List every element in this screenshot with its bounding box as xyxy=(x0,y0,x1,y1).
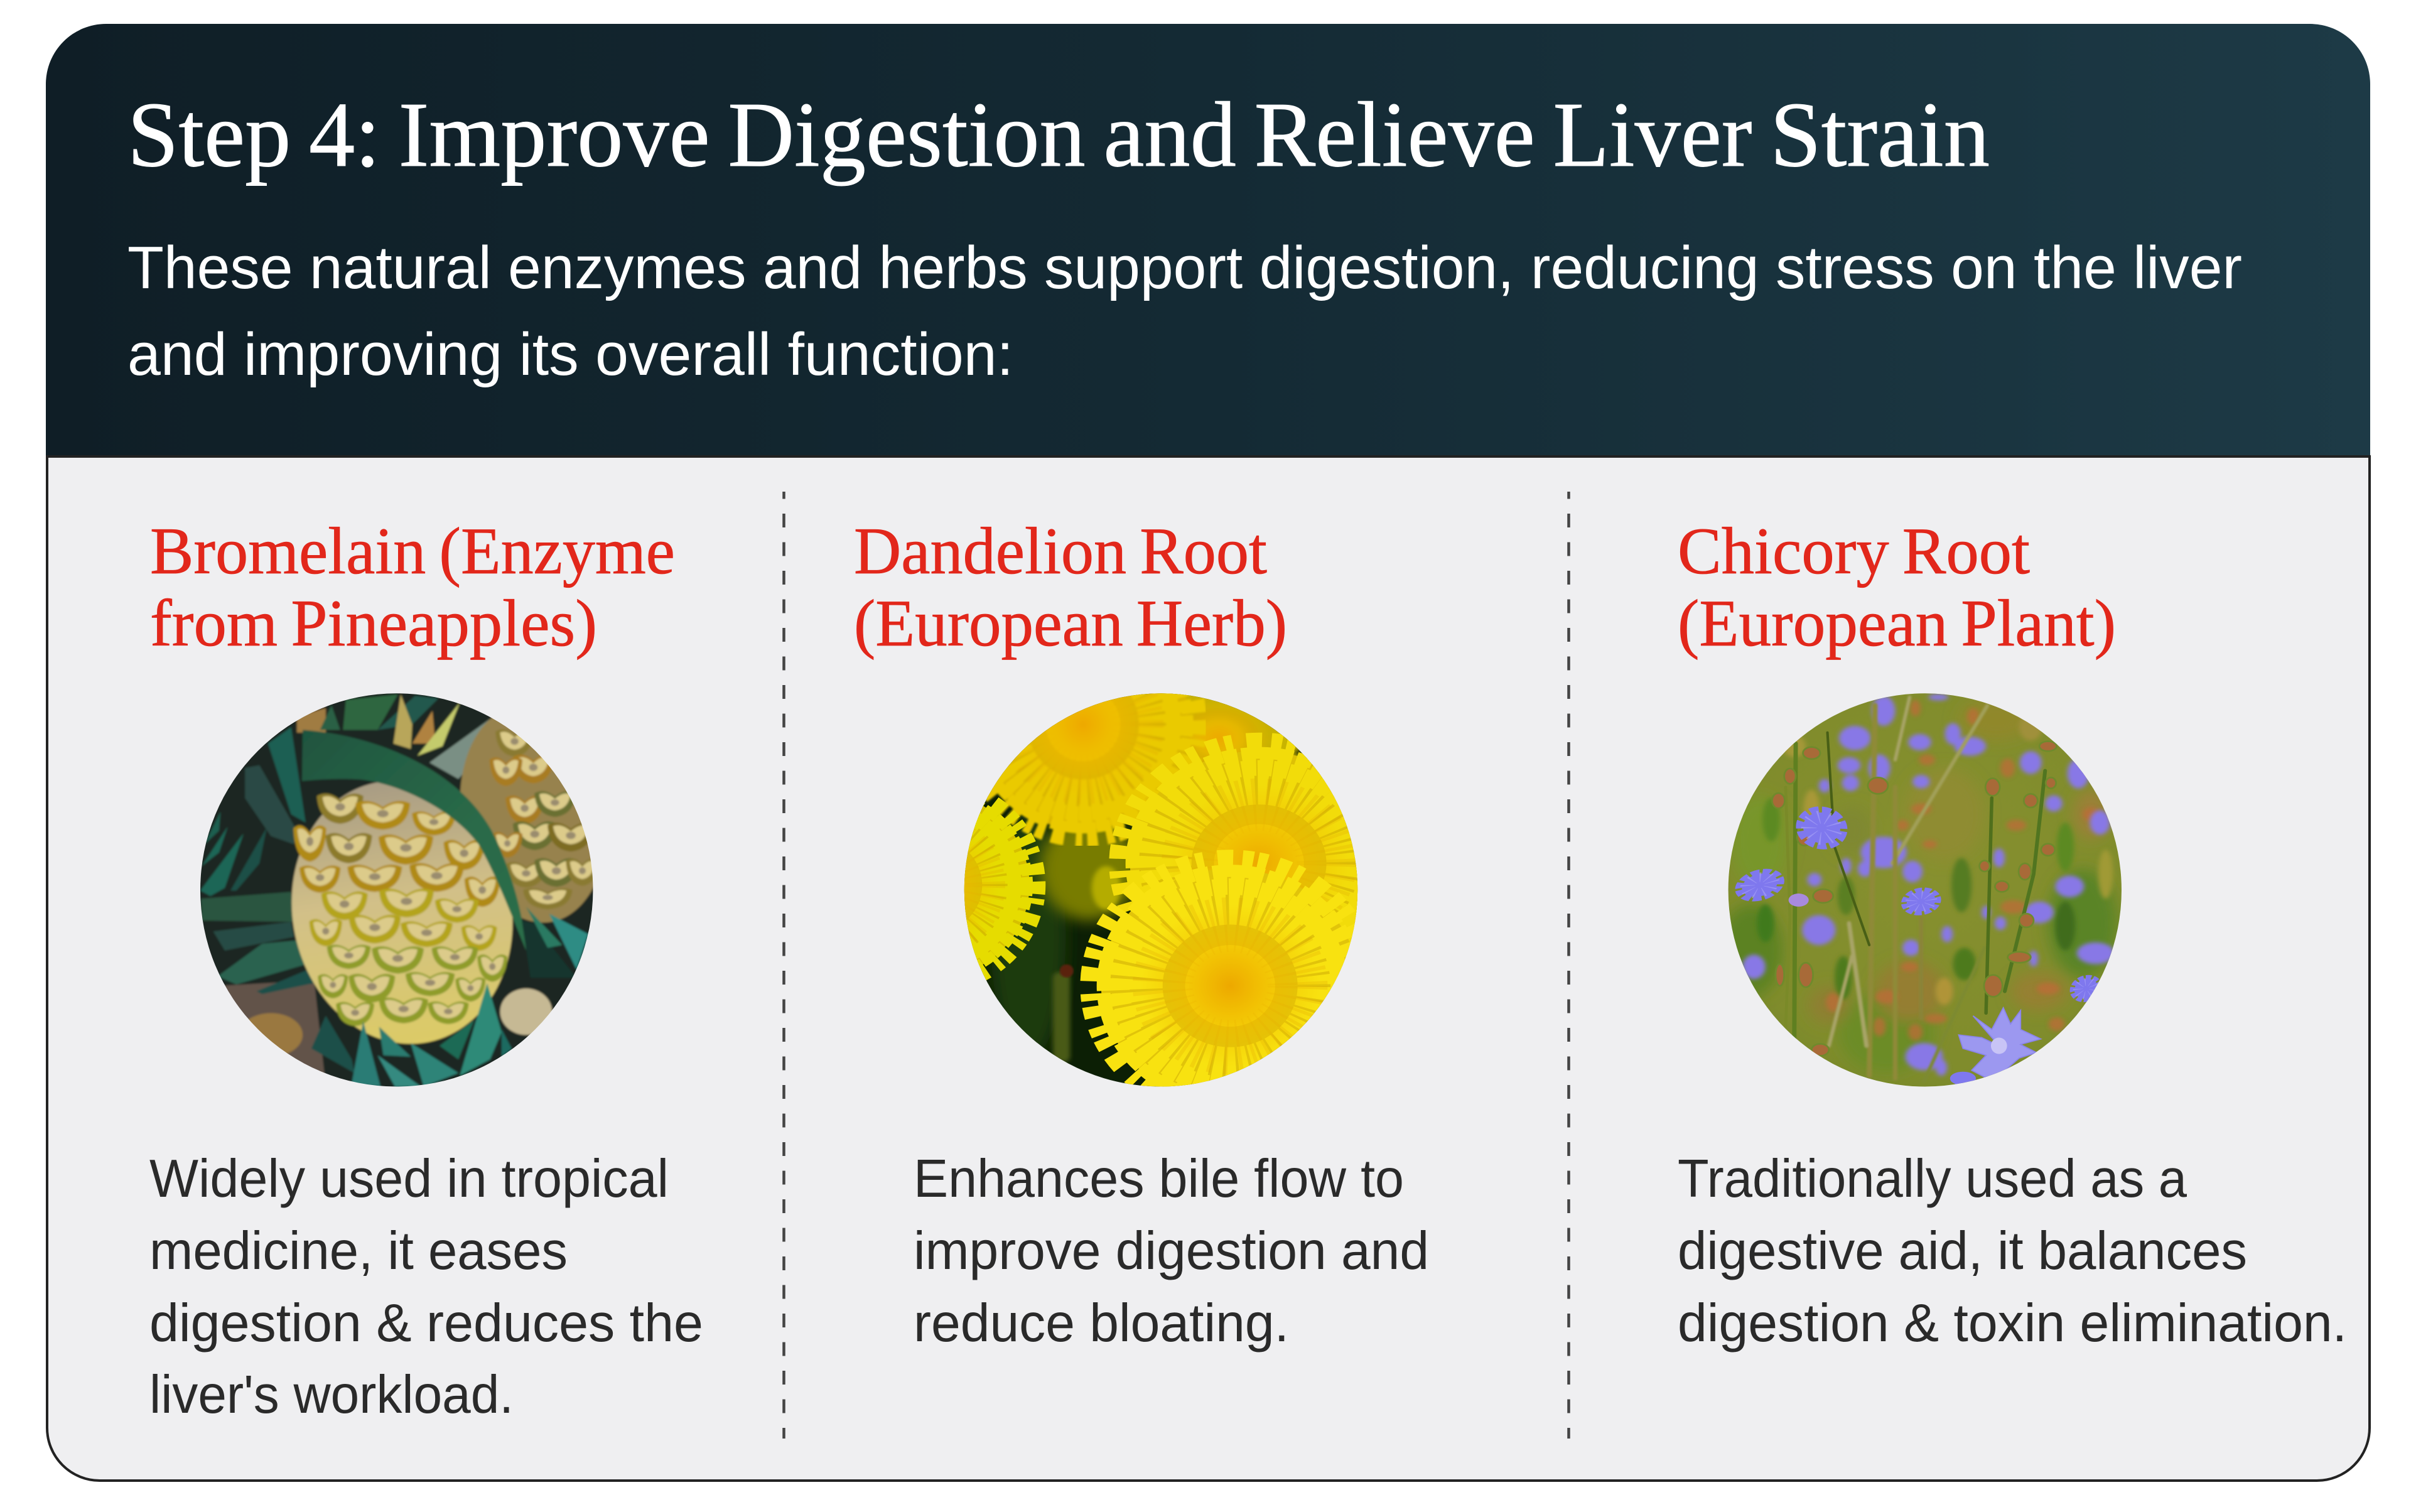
photo: pineapple xyxy=(200,693,593,1086)
body: dandelion: Enhances bile flow to xyxy=(914,1149,1404,1209)
sharp chicory flowers xyxy=(1736,806,2103,1085)
ginger knob xyxy=(500,988,552,1035)
main pineapple xyxy=(290,781,515,1046)
column: chicory root xyxy=(1678,514,2347,1353)
body: bromelain: digestion & reduces the xyxy=(149,1293,703,1353)
blurred purple blooms xyxy=(1742,694,2114,1076)
heading: chicory: (European Plant) xyxy=(1678,586,2116,660)
bottom leaves xyxy=(311,1016,355,1073)
header panel xyxy=(46,24,2370,456)
body: bromelain: medicine, it eases xyxy=(149,1221,568,1281)
mottled foliage dabs xyxy=(1757,713,2113,1005)
heading: dandelion: Dandelion Root xyxy=(854,514,1267,588)
stem with bud xyxy=(1053,964,1074,1062)
photo: dandelion flowers xyxy=(826,614,1394,1108)
heading: chicory: Chicory Root xyxy=(1678,514,2030,588)
dry husks lower left xyxy=(225,981,326,1073)
subtitle xyxy=(127,234,2242,388)
heading: bromelain: Bromelain (Enzyme xyxy=(150,514,675,588)
body: bromelain: Widely used in tropical xyxy=(149,1149,669,1209)
leaves top xyxy=(343,694,398,730)
title: Step 4: Improve Digestion and Relieve Liver Strain xyxy=(127,84,1990,186)
body: chicory: Traditionally used as a xyxy=(1678,1149,2187,1209)
heading: chicory xyxy=(1678,514,2116,660)
heading: dandelion: (European Herb) xyxy=(854,586,1287,660)
body: dandelion: reduce bloating. xyxy=(914,1293,1289,1353)
tan soft stems xyxy=(1829,697,1987,1081)
photo: chicory meadow xyxy=(1719,686,2135,1095)
right lower leaves xyxy=(522,921,576,978)
heading: bromelain xyxy=(150,514,675,660)
body: chicory: digestive aid, it balances xyxy=(1678,1221,2247,1281)
body: bromelain xyxy=(149,1149,703,1425)
big arching leaf xyxy=(302,730,526,951)
body: dandelion: improve digestion and xyxy=(914,1221,1429,1281)
subtitle: and improving its overall function: xyxy=(127,321,1013,388)
right pineapple xyxy=(458,717,593,924)
column: bromelain xyxy=(149,514,703,1425)
heading: dandelion xyxy=(854,514,1287,660)
sharp green stems xyxy=(1786,733,2045,1040)
leaves left xyxy=(268,727,306,823)
body: dandelion xyxy=(914,1149,1429,1353)
subtitle: These natural enzymes and herbs support digestion, reducing stress on the liver xyxy=(127,234,2242,301)
body: bromelain: liver's workload. xyxy=(149,1365,514,1425)
buds xyxy=(1772,742,2057,1056)
body: chicory: digestion & toxin elimination. xyxy=(1678,1293,2347,1353)
content panel xyxy=(47,456,2370,1481)
blurred orange buds xyxy=(1826,700,2100,1040)
column: dandelion root xyxy=(826,514,1429,1353)
body: chicory xyxy=(1678,1149,2347,1353)
heading: bromelain: from Pineapples) xyxy=(150,586,597,660)
